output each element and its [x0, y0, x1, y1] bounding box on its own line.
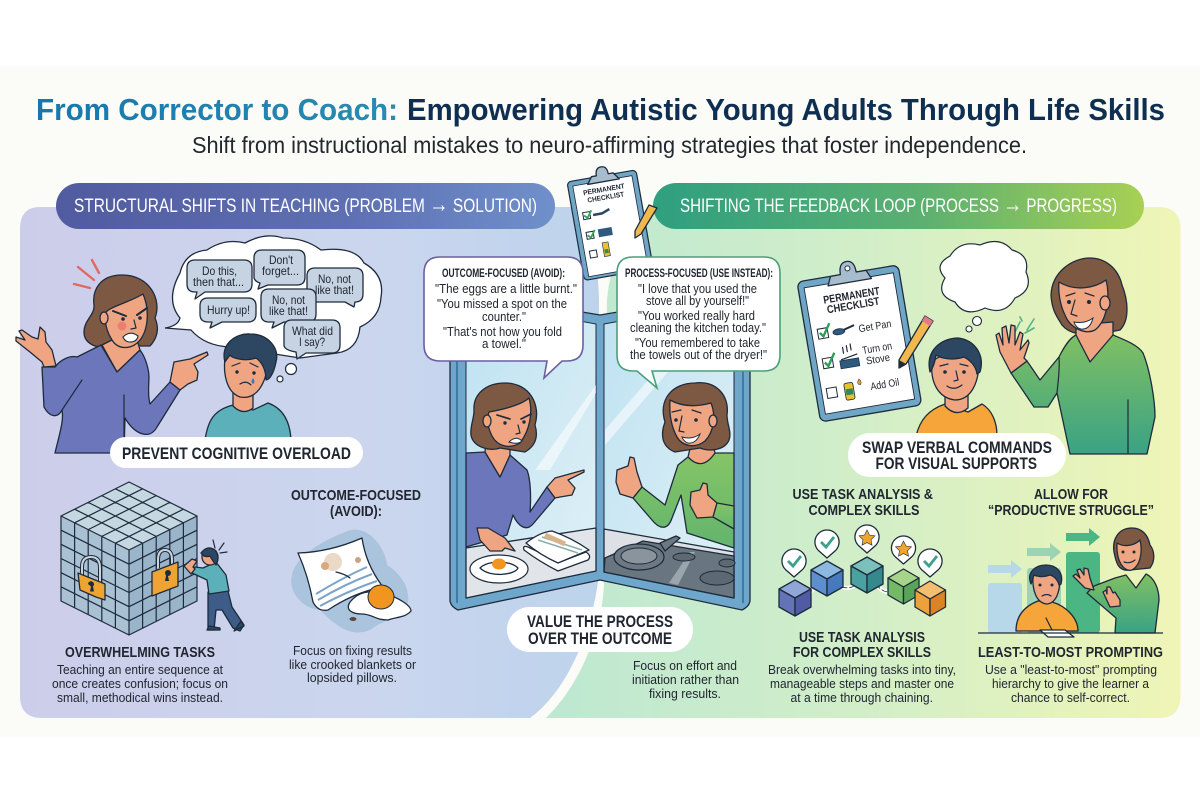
illustration: prompting steps with boy and coach [978, 528, 1163, 637]
text: task analysis: FOR COMPLEX SKILLS [793, 644, 931, 661]
pill: prevent cognitive overload: PREVENT COGNITIVE OVERLOAD [122, 445, 351, 463]
text: least-to-most prompting: LEAST-TO-MOST PROMPTING [978, 644, 1163, 661]
text: focus on fixing [289, 643, 417, 685]
illustration: permanent checklist clipboard: Add Oil [870, 376, 900, 393]
illustration: mirror left woman [466, 383, 596, 598]
text: task analysis: manageable steps and master one [770, 676, 954, 691]
callout: process-focused feedback: PROCESS-FOCUSED (USE INSTEAD): [625, 268, 773, 280]
panel: structural shifts background [20, 207, 600, 718]
text: task analysis [768, 629, 956, 705]
illustration: small clipboard: PERMANENT [583, 183, 626, 197]
pill: swap verbal commands [848, 433, 1066, 477]
callout: outcome-focused feedback: a towel." [482, 336, 526, 351]
illustration: permanent checklist clipboard: Turn on [861, 340, 893, 357]
text: least-to-most prompting [978, 644, 1163, 705]
illustration: small clipboard: CHECKLIST [587, 191, 625, 205]
heading: productive struggle [988, 486, 1154, 519]
callout: process-focused feedback: stove all by yourself!" [646, 293, 749, 308]
illustration: overloaded thought cloud and boy [165, 236, 382, 440]
heading: outcome-focused avoid: (AVOID): [330, 503, 382, 520]
speech bubbles: corrections: No, not [272, 293, 306, 307]
pill: value the process [507, 607, 693, 652]
text: overwhelming tasks: small, methodical wins instead. [57, 690, 223, 705]
text: focus on effort [632, 658, 739, 701]
illustration: mirror frame [450, 290, 750, 610]
illustration: person pushing cube [184, 540, 244, 631]
illustration: permanent checklist clipboard [795, 253, 922, 422]
header: feedback loop: SHIFTING THE FEEDBACK LOOP (PROCESS → PROGRESS) [680, 191, 1117, 218]
callout: outcome-focused feedback: "That's not how you fold [443, 324, 562, 339]
callout: outcome-focused feedback: OUTCOME-FOCUSED (AVOID): [442, 268, 565, 280]
title: Empowering Autistic Young Adults Through Life Skills [407, 92, 1165, 127]
heading: productive struggle: ALLOW FOR [1034, 486, 1108, 503]
header: feedback loop [653, 183, 1144, 229]
speech bubbles: corrections: like that! [315, 283, 354, 297]
text: overwhelming tasks: Teaching an entire sequence at [57, 662, 223, 677]
callout: process-focused feedback: "I love that you used the [638, 281, 757, 296]
illustration: calm boy [916, 338, 997, 436]
illustration: pencil [899, 316, 933, 368]
panel: feedback loop background [546, 207, 1180, 718]
text: task analysis: at a time through chaining. [790, 690, 933, 705]
illustration: small clipboard [565, 161, 657, 280]
illustration: empty thought cloud [940, 241, 1028, 332]
callout: process-focused feedback [617, 257, 780, 388]
callout: outcome-focused feedback: counter." [482, 309, 526, 324]
text: task analysis: USE TASK ANALYSIS [799, 629, 925, 646]
speech bubbles: corrections: like that! [269, 304, 308, 318]
text: overwhelming tasks: OVERWHELMING TASKS [65, 644, 215, 661]
speech bubbles: corrections: Do this, [202, 264, 237, 278]
pill: value the process: VALUE THE PROCESS [527, 612, 673, 631]
illustration: angry woman pointing [16, 260, 208, 453]
heading: use task analysis [792, 486, 933, 519]
speech bubbles: corrections: Don't [269, 253, 294, 267]
callout: process-focused feedback: "You worked really hard [638, 308, 755, 323]
header: structural shifts [56, 183, 555, 229]
pill: swap verbal commands: SWAP VERBAL COMMANDS [862, 439, 1052, 457]
heading: productive struggle: “PRODUCTIVE STRUGGLE” [988, 502, 1154, 519]
illustration: permanent checklist clipboard: CHECKLIST [826, 296, 881, 316]
text: focus on effort: Focus on effort and [633, 658, 737, 673]
speech bubbles: corrections: Hurry up! [207, 303, 250, 317]
speech bubbles: corrections: No, not [318, 272, 352, 286]
text: task analysis: Break overwhelming tasks into tiny, [768, 662, 956, 677]
text: focus on effort: initiation rather than [632, 672, 739, 687]
title [36, 92, 1165, 127]
text: focus on fixing: lopsided pillows. [307, 670, 397, 685]
heading: use task analysis: COMPLEX SKILLS [808, 502, 920, 519]
callout: outcome-focused feedback: "The eggs are a little burnt." [435, 281, 577, 296]
heading: use task analysis: USE TASK ANALYSIS & [792, 486, 933, 503]
callout: outcome-focused feedback: "You missed a spot on the [437, 296, 567, 311]
speech bubbles: corrections: forget... [262, 264, 299, 278]
text: least-to-most prompting: hierarchy to give the learner a [992, 676, 1150, 691]
illustration: permanent checklist clipboard: Get Pan [858, 318, 892, 335]
pill: swap verbal commands: FOR VISUAL SUPPORTS [876, 455, 1037, 473]
pill: prevent cognitive overload [110, 437, 363, 468]
text: least-to-most prompting: Use a "least-to-most" prompting [985, 662, 1157, 677]
speech bubbles: corrections: I say? [299, 335, 325, 349]
illustration: stained pillow and burnt egg [291, 530, 411, 632]
pill: value the process: OVER THE OUTCOME [528, 629, 672, 648]
title: From Corrector to Coach: [36, 92, 398, 127]
callout: process-focused feedback: the towels out of the dryer!" [630, 347, 767, 362]
illustration: smiling woman with raised hand [996, 258, 1155, 454]
callout: process-focused feedback: cleaning the kitchen today." [630, 320, 766, 335]
subtitle: Shift from instructional mistakes to neuro-affirming strategies that foster independence. [192, 132, 1027, 158]
illustration: chained cubes with badges [779, 525, 946, 616]
speech bubbles: corrections: then that... [193, 275, 244, 289]
text: overwhelming tasks [52, 644, 228, 705]
heading: outcome-focused avoid [291, 487, 421, 520]
callout: outcome-focused feedback [424, 257, 583, 378]
header: structural shifts: STRUCTURAL SHIFTS IN TEACHING (PROBLEM → SOLUTION) [74, 191, 537, 218]
text: focus on fixing: Focus on fixing results [293, 643, 412, 658]
illustration: permanent checklist clipboard: Stove [865, 352, 891, 367]
illustration: locked cube [61, 482, 197, 635]
text: overwhelming tasks: once creates confusion; focus on [52, 676, 228, 691]
text: focus on effort: fixing results. [649, 686, 721, 701]
illustration: permanent checklist clipboard: PERMANENT [823, 285, 881, 307]
speech bubbles: corrections: What did [292, 324, 333, 338]
illustration: mirror right woman [604, 383, 735, 598]
text: focus on fixing: like crooked blankets or [289, 657, 417, 672]
speech bubbles: corrections [187, 250, 363, 359]
heading: outcome-focused avoid: OUTCOME-FOCUSED [291, 487, 421, 504]
text: least-to-most prompting: chance to self-correct. [1011, 690, 1130, 705]
callout: process-focused feedback: "You remembered to take [635, 335, 760, 350]
